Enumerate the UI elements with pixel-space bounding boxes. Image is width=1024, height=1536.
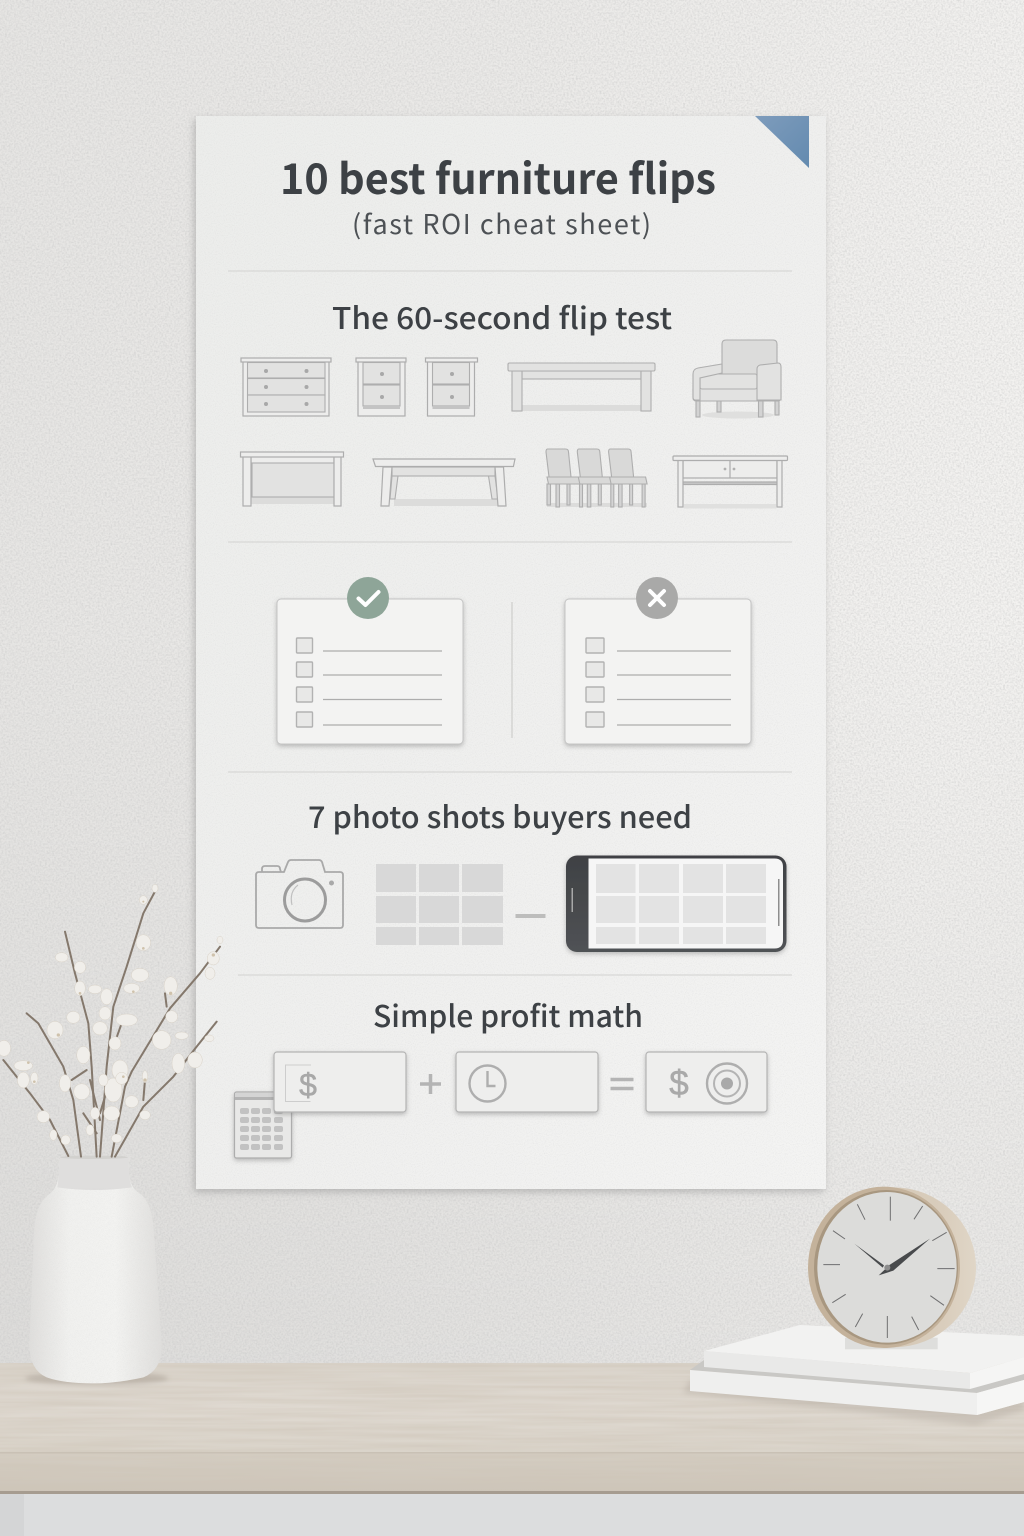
plus sign: [420, 1074, 441, 1094]
box: cost: [274, 1052, 406, 1112]
dash connector: [516, 914, 546, 918]
heading: photo shots: 7 photo shots buyers need: [308, 793, 692, 837]
icon: grey cross badge: [636, 577, 678, 619]
desk clock: [808, 1187, 976, 1349]
heading: flip test: The 60-second flip test: [332, 294, 672, 338]
title: 10 best furniture flips: [280, 146, 716, 207]
icon: armchair: [693, 340, 781, 418]
poster panel: [196, 116, 826, 1189]
equals sign: [610, 1080, 634, 1088]
icon: dresser: [241, 358, 331, 416]
stacked books: [683, 1325, 1024, 1425]
icon: smartphone with photo grid: [566, 856, 786, 952]
box: time: [456, 1052, 598, 1112]
icon: green check badge: [347, 577, 389, 619]
icon: camera: [256, 860, 343, 928]
branches with buds: [0, 884, 223, 1157]
card: avoid checklist: [565, 577, 751, 744]
icon: row of three chairs: [546, 449, 647, 507]
desk surface: [0, 1363, 1024, 1536]
subtitle: (fast ROI cheat sheet): [352, 203, 651, 242]
icon: console table: [240, 452, 344, 506]
clock body: [808, 1187, 976, 1349]
box: profit target: [646, 1052, 767, 1112]
icon: calendar: [234, 1092, 292, 1158]
clock ticks: [823, 1197, 955, 1338]
card: do checklist: [277, 577, 463, 744]
blue corner fold: [755, 116, 809, 168]
photo grid 3x3: [376, 864, 503, 945]
box: cost: $: [299, 1067, 317, 1103]
icon: bench table: [508, 363, 655, 411]
icon: nightstand right: [426, 358, 478, 416]
icon: coffee table: [373, 459, 515, 506]
heading: profit math: Simple profit math: [373, 992, 643, 1036]
box: profit target: $: [669, 1064, 689, 1103]
clock hands: [854, 1239, 930, 1275]
vase: [25, 1156, 168, 1385]
icon: nightstand left: [356, 358, 406, 416]
icon: low cabinet: [673, 456, 788, 508]
